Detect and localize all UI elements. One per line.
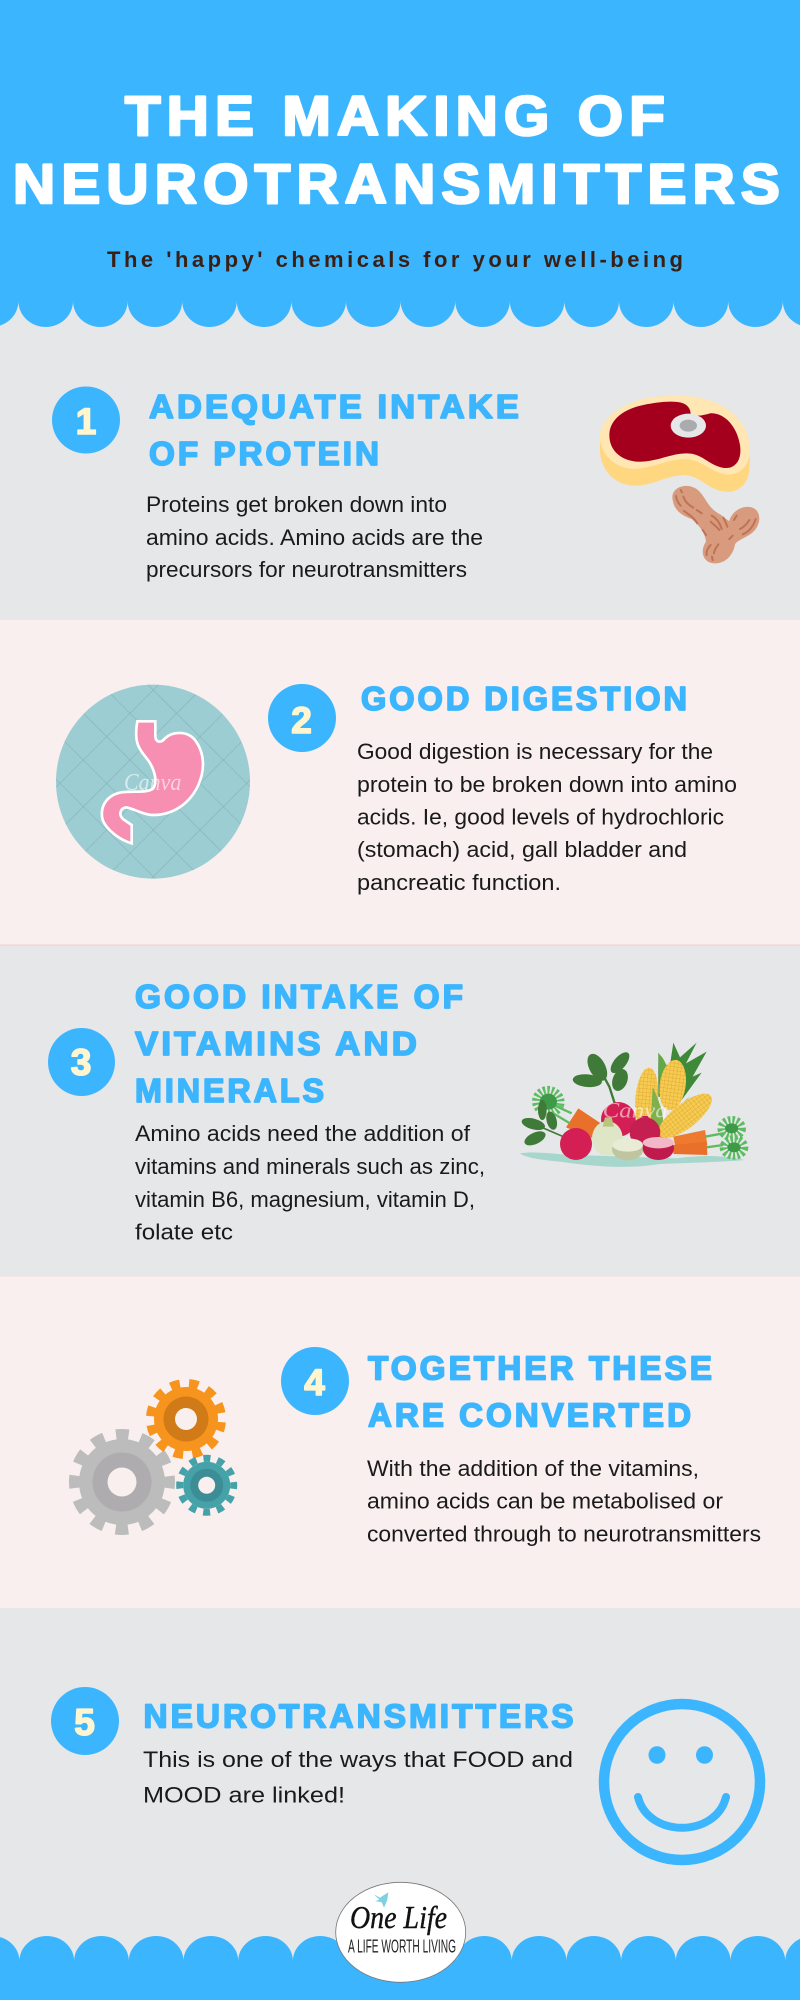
heading 1 (149, 388, 522, 472)
gray gear (74, 1434, 170, 1530)
body text 2: (stomach) acid, gall bladder and (357, 837, 687, 862)
panel: digestion section background (0, 620, 800, 945)
body text 3: vitamins and minerals such as zinc, (135, 1154, 485, 1179)
panel: vitamins section background (0, 945, 800, 1276)
body text 3: Amino acids need the addition of (135, 1121, 471, 1146)
logo: One Life: A LIFE WORTH LIVING (348, 1936, 456, 1956)
number badge 1: 1 (76, 401, 96, 442)
step 4: together these are converted (74, 1347, 761, 1547)
icon: steak and peanut (600, 395, 759, 563)
body text 2: pancreatic function. (357, 870, 561, 895)
step 2: good digestion (56, 684, 736, 894)
heading 3: VITAMINS AND (135, 1025, 420, 1062)
icon: stomach in teal circle (56, 684, 250, 879)
body text 1: precursors for neurotransmitters (146, 557, 467, 582)
heading 3 (135, 978, 466, 1109)
title: THE MAKING OF (125, 84, 671, 147)
heading 1: OF PROTEIN (149, 435, 382, 472)
icon: vegetables: Canva (603, 1097, 668, 1122)
step 1: adequate intake of protein (52, 386, 759, 582)
logo: One Life (336, 1882, 466, 1982)
heading 4: TOGETHER THESE (368, 1350, 715, 1386)
heading 1: ADEQUATE INTAKE (149, 388, 522, 425)
panel: conversion section background (0, 1276, 800, 1608)
icon: vegetables (520, 1043, 745, 1167)
body text 5: MOOD are linked! (143, 1782, 345, 1808)
body text 4: With the addition of the vitamins, (367, 1456, 699, 1481)
body text 3 (135, 1121, 485, 1244)
panel: protein section background (0, 300, 800, 620)
body text 2 (357, 739, 737, 895)
heading 2: GOOD DIGESTION (361, 680, 690, 717)
icon: bird (374, 1892, 388, 1908)
body text 3: folate etc (135, 1220, 233, 1244)
body text 5 (143, 1747, 573, 1808)
footer scalloped band (0, 1936, 800, 2000)
step 5: neurotransmitters (51, 1687, 760, 1860)
heading 3: GOOD INTAKE OF (135, 978, 466, 1015)
subtitle: The 'happy' chemicals for your well-being (107, 247, 683, 272)
icon: stomach in teal circle: Canva (124, 769, 181, 796)
body text 5: This is one of the ways that FOOD and (143, 1747, 573, 1772)
number badge 5: 5 (74, 1702, 95, 1743)
number badge 4: 4 (304, 1362, 325, 1403)
title (13, 84, 786, 215)
heading 4 (368, 1350, 715, 1434)
icon: gears (74, 1377, 234, 1530)
body text 4 (367, 1456, 761, 1547)
heading 5: NEUROTRANSMITTERS (144, 1698, 576, 1734)
body text 2: acids. Ie, good levels of hydrochloric (357, 804, 724, 830)
title: NEUROTRANSMITTERS (13, 152, 786, 215)
number badge 1 (52, 386, 120, 454)
number badge 2 (268, 684, 336, 752)
heading 3: MINERALS (135, 1072, 327, 1109)
number badge 4 (281, 1347, 349, 1415)
heading 4: ARE CONVERTED (368, 1396, 694, 1434)
body text 4: amino acids can be metabolised or (367, 1489, 723, 1514)
body text 2: protein to be broken down into amino (357, 772, 737, 797)
body text 1 (146, 492, 483, 582)
number badge 3: 3 (71, 1042, 91, 1083)
number badge 5 (51, 1687, 119, 1755)
number badge 3 (48, 1028, 115, 1096)
icon: smiley face (604, 1704, 760, 1860)
orange gear (144, 1377, 228, 1461)
panel: neurotransmitters section background (0, 1608, 800, 2000)
number badge 2: 2 (291, 700, 312, 741)
body text 2: Good digestion is necessary for the (357, 739, 713, 764)
body text 4: converted through to neurotransmitters (367, 1522, 761, 1547)
body text 1: Proteins get broken down into (146, 492, 447, 517)
body text 3: vitamin B6, magnesium, vitamin D, (135, 1187, 475, 1212)
body text 1: amino acids. Amino acids are the (146, 525, 483, 550)
header banner with scalloped edge (0, 0, 800, 327)
logo: One Life: One Life (350, 1899, 447, 1935)
step 3: vitamins and minerals (48, 978, 745, 1244)
teal gear (180, 1458, 234, 1512)
